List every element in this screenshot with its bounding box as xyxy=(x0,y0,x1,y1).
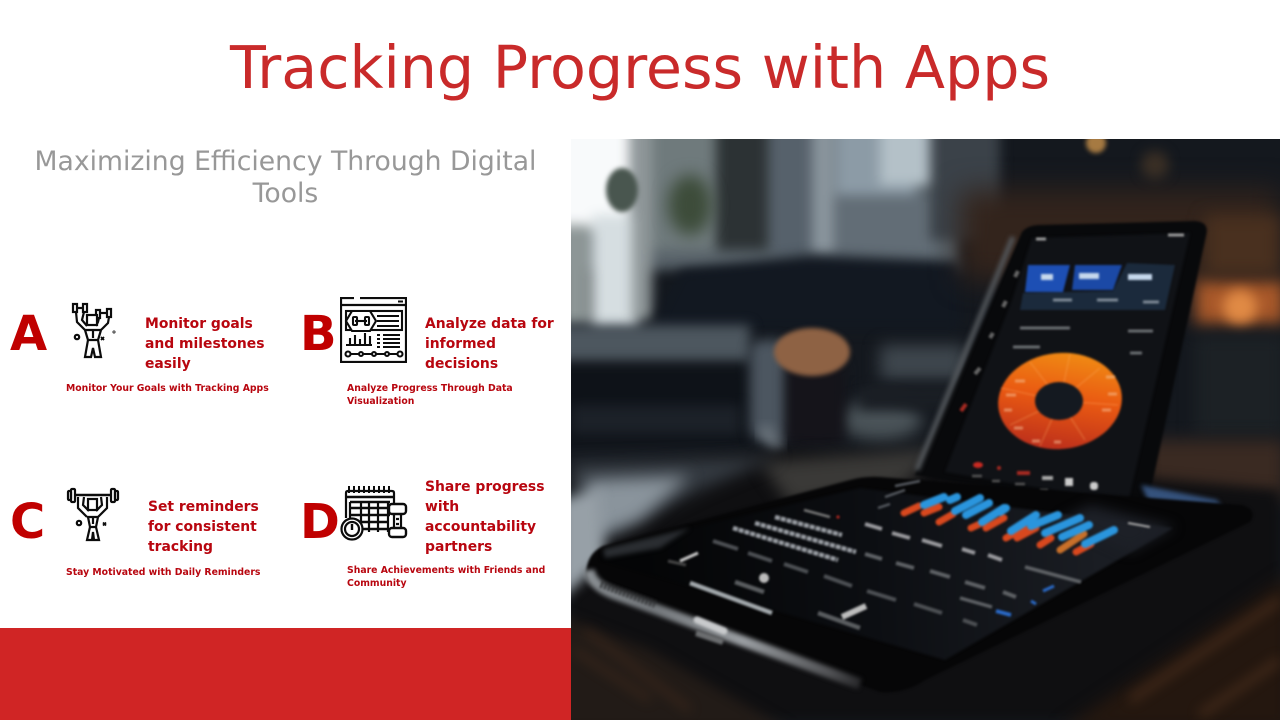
heading B: decisions xyxy=(425,356,498,372)
heading D xyxy=(425,479,544,555)
caption B: Visualization xyxy=(347,396,414,407)
subtitle: Maximizing Efficiency Through Digital xyxy=(35,146,536,177)
heading B xyxy=(425,316,554,372)
upright phone xyxy=(915,221,1207,512)
subtitle xyxy=(35,146,536,209)
panel: A monitor goals xyxy=(10,302,269,394)
heading C: for consistent xyxy=(148,519,257,535)
heading B: informed xyxy=(425,336,496,352)
red footer band xyxy=(0,628,571,720)
heading A: and milestones xyxy=(145,336,264,352)
caption D: Share Achievements with Friends and xyxy=(347,565,545,576)
icon: calendar, stopwatch and dumbbell xyxy=(340,486,408,541)
background room xyxy=(550,115,1280,720)
caption A: Monitor Your Goals with Tracking Apps xyxy=(66,383,269,394)
donut chart xyxy=(993,347,1127,455)
icon: weightlifter with dumbbells xyxy=(72,302,116,358)
subtitle: Tools xyxy=(253,178,318,209)
charging port and speaker xyxy=(601,584,724,642)
heading C: tracking xyxy=(148,539,213,555)
wooden table xyxy=(560,448,1280,720)
app rows on flat phone xyxy=(668,481,1150,628)
sofa and ledge xyxy=(655,255,960,330)
heading B: Analyze data for xyxy=(425,316,554,332)
caption B: Analyze Progress Through Data xyxy=(347,383,513,394)
app header cards xyxy=(1013,235,1184,353)
letter D: D xyxy=(300,494,340,550)
caption D xyxy=(347,565,545,589)
caption B xyxy=(347,383,513,407)
heading A: Monitor goals xyxy=(145,316,253,332)
panel: B analyze data xyxy=(300,297,554,407)
heading A: easily xyxy=(145,356,191,372)
panel: C set reminders xyxy=(10,488,260,578)
icon: weightlifter with barbell xyxy=(66,488,120,542)
warm right wall xyxy=(960,190,1280,280)
letter B: B xyxy=(300,306,337,362)
photo: smartphones showing fitness analytics on a dark table xyxy=(571,139,1280,720)
bar chart on flat phone xyxy=(904,497,1114,552)
caption D: Community xyxy=(347,578,407,589)
heading D: with xyxy=(425,499,459,515)
letter A: A xyxy=(10,306,47,362)
letter C: C xyxy=(10,494,45,550)
heading C xyxy=(148,499,259,555)
heading C: Set reminders xyxy=(148,499,259,515)
bottom tab icons xyxy=(961,271,1098,499)
title: Tracking Progress with Apps xyxy=(230,34,1050,102)
flat phone xyxy=(586,477,1253,692)
icon: analytics dashboard window xyxy=(340,297,407,363)
heading D: accountability xyxy=(425,519,536,535)
heading D: Share progress xyxy=(425,479,544,495)
curtains and window xyxy=(550,115,1000,330)
plant pot on the table xyxy=(750,328,850,450)
panel: D share progress xyxy=(300,479,545,589)
caption C: Stay Motivated with Daily Reminders xyxy=(66,567,260,578)
heading D: partners xyxy=(425,539,492,555)
heading A xyxy=(145,316,264,372)
